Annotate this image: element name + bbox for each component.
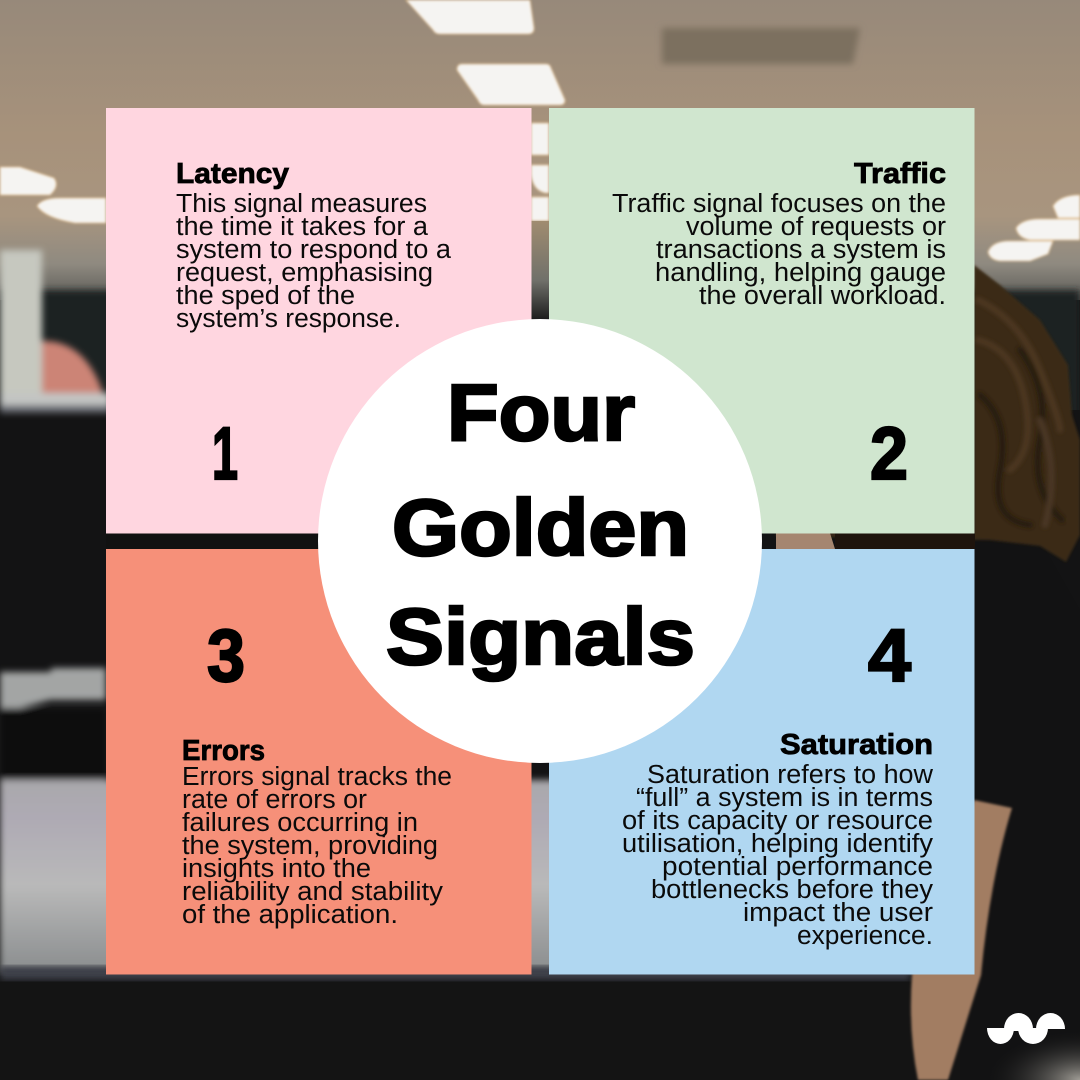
text block: Latency description: system to respond to a (176, 236, 452, 264)
number 1: 1 (212, 412, 238, 495)
title: Four Golden Signals: Signals (386, 592, 695, 681)
text block: Errors description: rate of errors or (182, 786, 368, 814)
heading: Errors: Errors (182, 735, 265, 767)
text block: Saturation description: utilisation, helping identify (622, 830, 933, 858)
title: Four Golden Signals: Four (447, 368, 635, 457)
number 3: 3 (207, 614, 245, 697)
text block: Latency description: request, emphasising (176, 259, 433, 287)
person: hair (776, 265, 1080, 562)
number 2: 2 (870, 412, 908, 495)
text block: Saturation description: “full” a system is in terms (636, 784, 933, 812)
text block: Saturation description: potential performance (662, 853, 933, 881)
text block: Traffic description: the overall workload. (699, 282, 946, 310)
text block: Saturation description (622, 761, 934, 950)
title: Four Golden Signals: Golden (392, 483, 689, 572)
text block: Errors description: the system, providing (182, 832, 438, 860)
text block: Traffic description: transactions a system is (656, 236, 946, 264)
text block: Saturation description: bottlenecks before they (651, 876, 933, 904)
text block: Errors description (182, 763, 452, 929)
text block: Saturation description: experience. (797, 922, 933, 950)
text block: Latency description: the time it takes for a (176, 213, 429, 241)
heading: Saturation: Saturation (780, 729, 933, 761)
text block: Errors description: insights into the (182, 855, 371, 883)
text block: Latency description (176, 190, 452, 333)
center circle with title (318, 319, 762, 763)
text block: Latency description: This signal measures (176, 190, 427, 218)
heading: Traffic: Traffic (854, 158, 946, 190)
icon: wave logo (987, 1013, 1065, 1044)
text block: Saturation description: Saturation refers to how (647, 761, 934, 789)
text block: Errors description: reliability and stability (182, 878, 443, 906)
text block: Saturation description: of its capacity or resource (622, 807, 933, 835)
panel: Errors (106, 549, 532, 974)
heading: Latency: Latency (176, 158, 289, 190)
text block: Traffic description: Traffic signal focuses on the (612, 190, 946, 218)
text block: Errors description: failures occurring in (182, 809, 418, 837)
text block: Latency description: the sped of the (176, 282, 355, 310)
person: arm (911, 800, 1012, 1080)
text block: Errors description: Errors signal tracks the (182, 763, 452, 791)
panel: Traffic (549, 108, 974, 534)
text block: Traffic description: handling, helping gauge (655, 259, 946, 287)
title: Four Golden Signals (386, 368, 695, 681)
panel: Latency (106, 108, 532, 534)
panel: Saturation (549, 549, 974, 974)
text block: Latency description: system’s response. (176, 305, 401, 333)
text block: Traffic description (612, 190, 947, 310)
person: skin at collar (776, 533, 835, 549)
number 4: 4 (868, 614, 911, 697)
text block: Traffic description: volume of requests or (686, 213, 947, 241)
person: shirt (974, 774, 1080, 976)
text block: Errors description: of the application. (182, 901, 398, 929)
text block: Saturation description: impact the user (743, 899, 934, 927)
